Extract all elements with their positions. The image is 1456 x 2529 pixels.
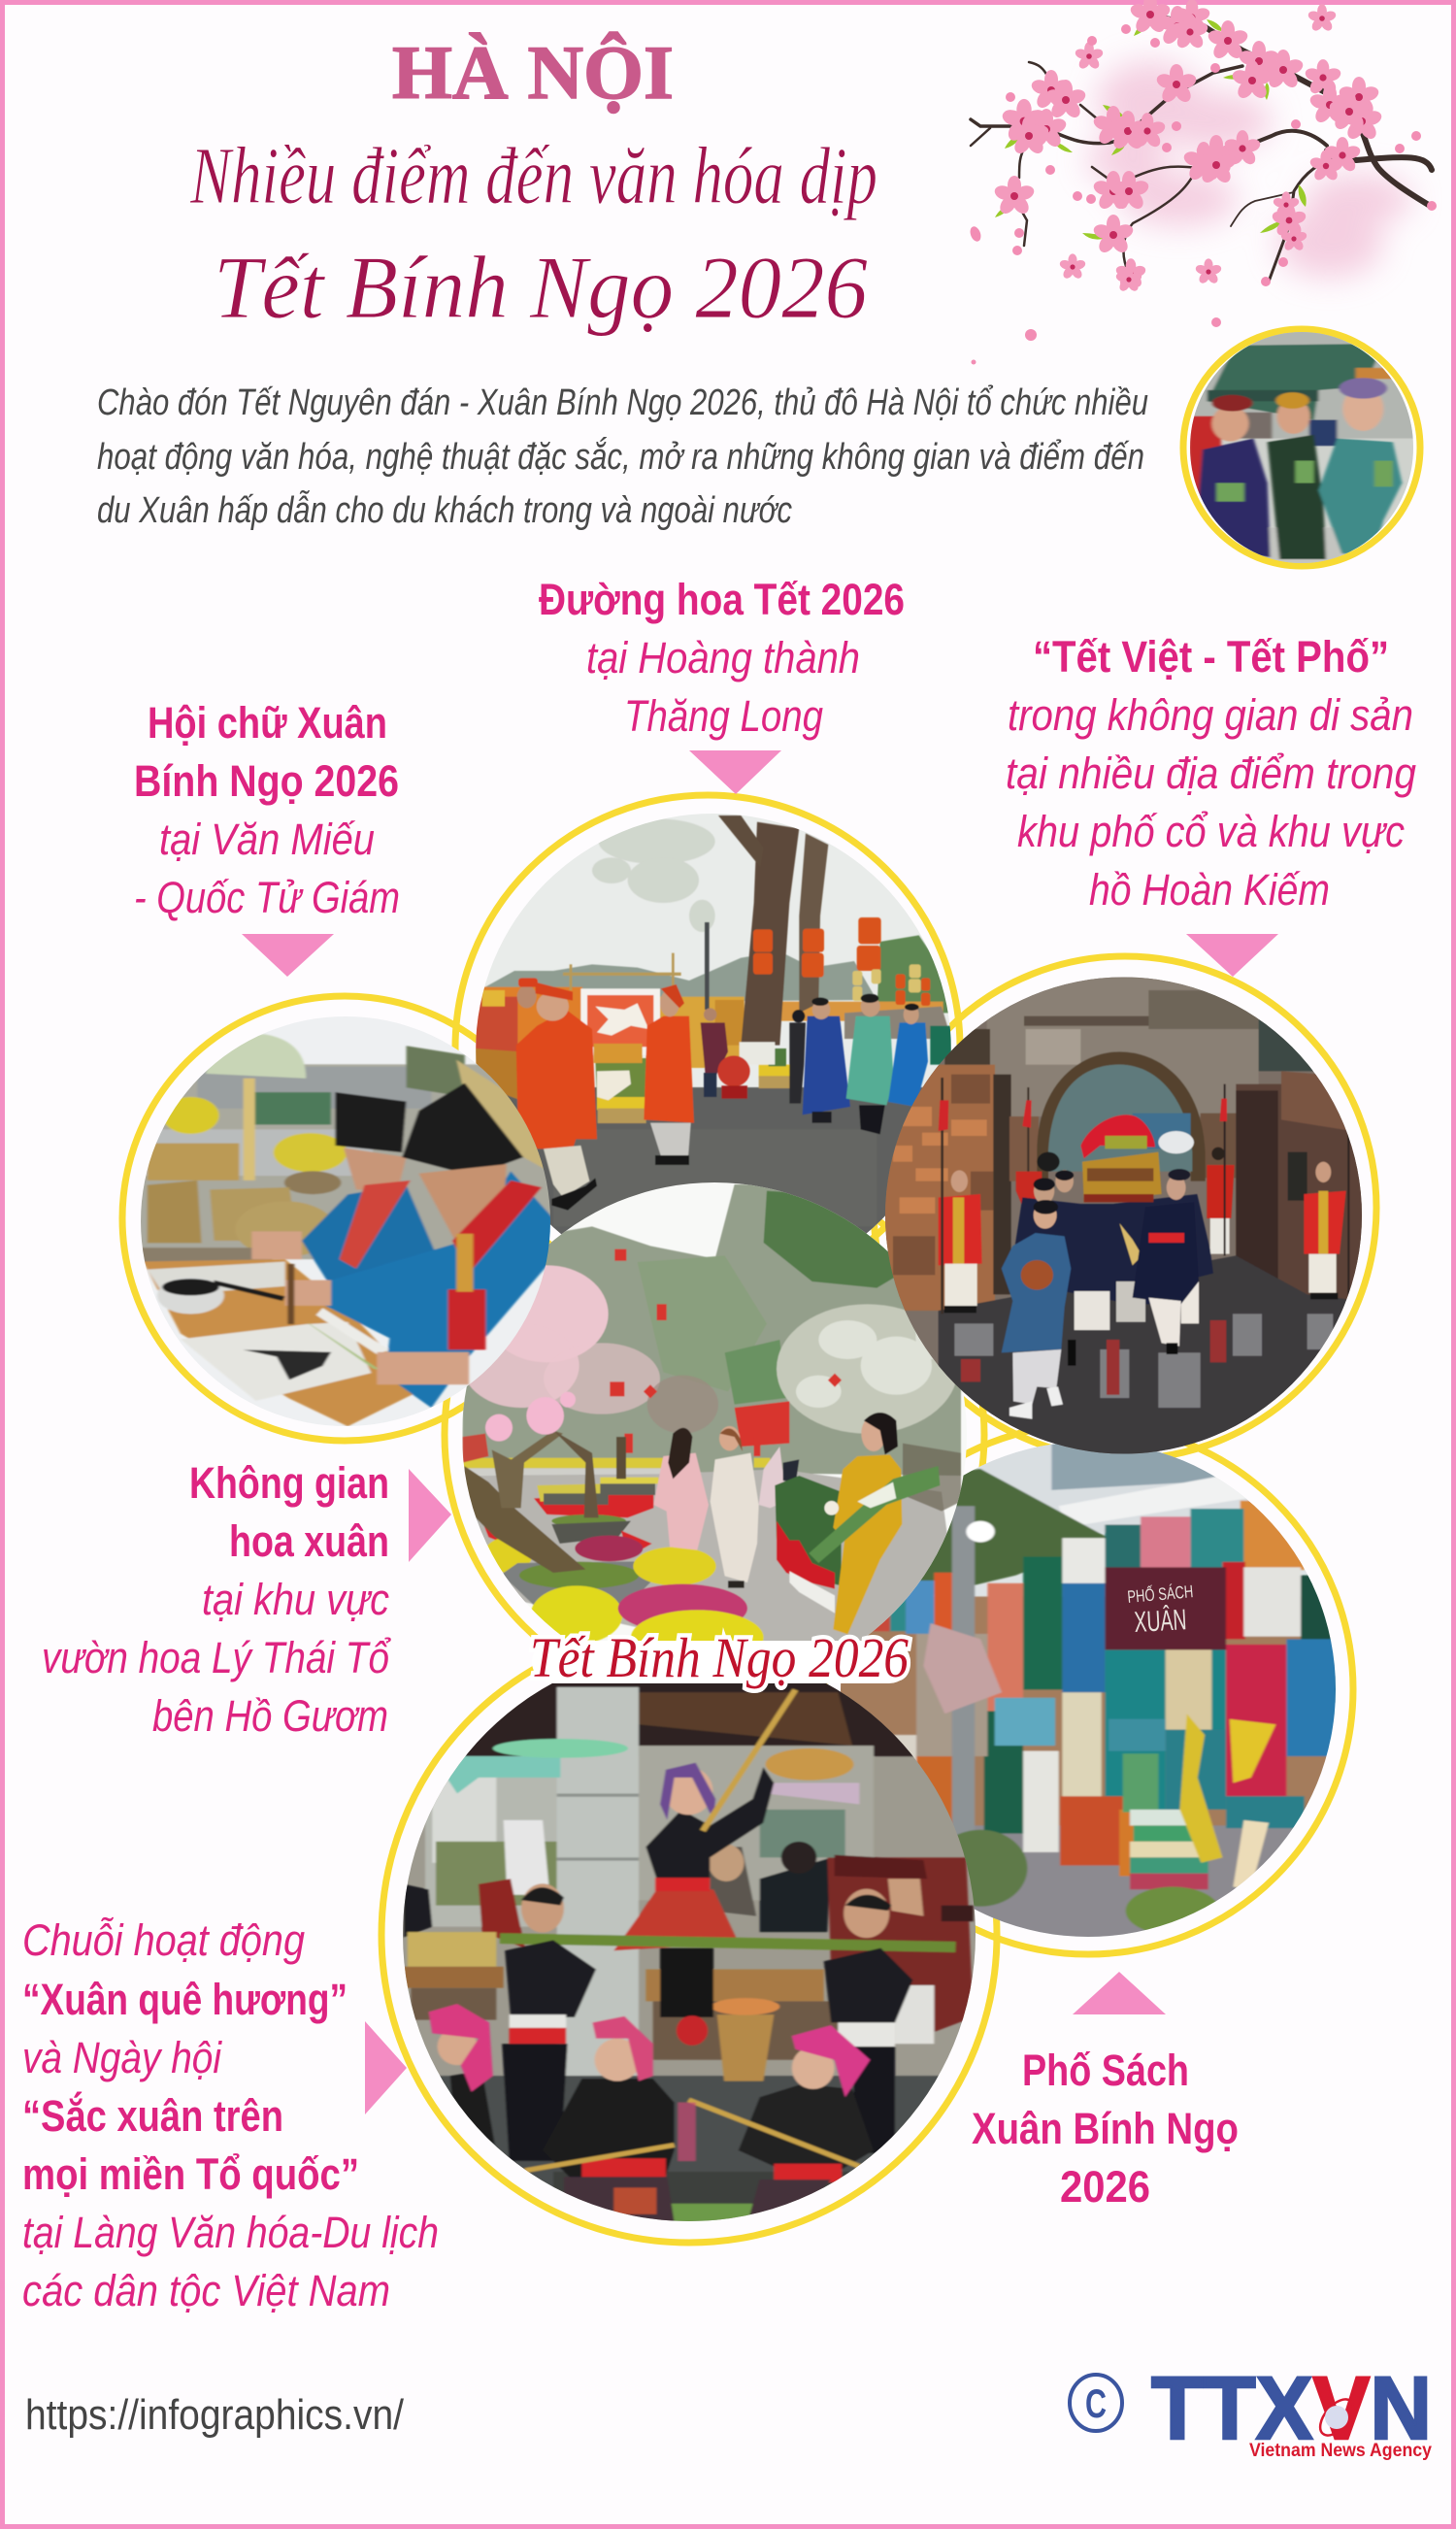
subtitle script line 1: Nhiều điểm đến văn hóa dịp (189, 131, 877, 221)
logo: TTXVN: Vietnam News Agency (1249, 2441, 1432, 2461)
label: Tết Việt - Tết Phố: “Tết Việt - Tết Phố” (1033, 632, 1389, 682)
label: Không gian hoa xuân: Không gian (189, 1458, 389, 1508)
subtitle script line 2: Tết Bính Ngọ 2026 (214, 238, 868, 337)
label: Đường hoa Tết 2026: Đường hoa Tết 2026 (539, 575, 905, 624)
banner: Tết Bính Ngọ 2026: Tết Bính Ngọ 2026 (530, 1626, 909, 1689)
blossom branch decoration (969, 0, 1437, 365)
label: Chuỗi hoạt động: “Sắc xuân trên (22, 2091, 283, 2141)
icon: copyright: C (1085, 2380, 1107, 2426)
label: Hội chữ Xuân: tại Văn Miếu (159, 815, 375, 864)
label: Không gian hoa xuân: hoa xuân (229, 1516, 389, 1566)
photo: Hội chữ Xuân, Văn Miếu (139, 1016, 557, 1427)
photo: Phố Sách Xuân: XUÂN (1134, 1604, 1187, 1639)
intro paragraph: Chào đón Tết Nguyên đán - Xuân Bính Ngọ 2026, thủ đô Hà Nội tổ chức nhiều (97, 383, 1148, 423)
label: Chuỗi hoạt động: “Xuân quê hương” (22, 1975, 347, 2024)
photo: Phố Sách Xuân (831, 1437, 1350, 1948)
photo: Tết Việt - Tết Phố, Cửa Ô Quan Chưởng (878, 971, 1373, 1466)
arrow: down to Tết Việt (1186, 934, 1278, 977)
label: Chuỗi hoạt động: Chuỗi hoạt động (22, 1915, 305, 1965)
label: Không gian hoa xuân: tại khu vực (202, 1575, 389, 1624)
label: Tết Việt - Tết Phố: trong không gian di sản (1008, 690, 1413, 740)
title: Hà Nội: HÀ NỘI (392, 30, 674, 115)
yellow rings behind photos (122, 795, 1376, 2243)
logo: TTXVN: TTXVN (1151, 2359, 1432, 2458)
label: Chuỗi hoạt động (22, 1915, 439, 2315)
label: Tết Việt - Tết Phố: khu phố cổ và khu vực (1017, 807, 1405, 856)
label: Đường hoa Tết 2026: Thăng Long (624, 691, 823, 741)
arrow: down to Đường hoa (689, 750, 781, 794)
intro paragraph: du Xuân hấp dẫn cho du khách trong và ngoài nước (97, 489, 792, 531)
arrow: down to Hội chữ (242, 934, 334, 977)
label: Không gian hoa xuân: vườn hoa Lý Thái Tổ (42, 1633, 392, 1682)
label: Hội chữ Xuân (134, 698, 400, 922)
label: Tết Việt - Tết Phố (1006, 632, 1416, 915)
label: Không gian hoa xuân: bên Hồ Gươm (152, 1691, 388, 1741)
label: Hội chữ Xuân: Bính Ngọ 2026 (134, 756, 399, 806)
label: Phố Sách Xuân Bính Ngọ 2026 (972, 2046, 1239, 2212)
label: Đường hoa Tết 2026 (539, 575, 905, 741)
arrow: right to Chuỗi hoạt động (365, 2021, 407, 2114)
intro paragraph (97, 383, 1148, 531)
arrow: right to Không gian (409, 1469, 451, 1562)
label: Chuỗi hoạt động: và Ngày hội (22, 2033, 223, 2082)
photo: Xuân quê hương, Làng Văn hóa-Du lịch (403, 1683, 976, 2221)
arrow: up to Phố Sách (1073, 1972, 1166, 2014)
intro paragraph: hoạt động văn hóa, nghệ thuật đặc sắc, mở ra những không gian và điểm đến (97, 436, 1144, 478)
small round photo: women in ao dai (1183, 325, 1422, 573)
label: Hội chữ Xuân: - Quốc Tử Giám (134, 873, 400, 922)
icon: copyright (1070, 2375, 1122, 2431)
label: Đường hoa Tết 2026: tại Hoàng thành (586, 633, 860, 682)
label: Không gian hoa xuân (42, 1458, 392, 1741)
label: Tết Việt - Tết Phố: hồ Hoàn Kiếm (1089, 865, 1330, 915)
label: Chuỗi hoạt động: tại Làng Văn hóa-Du lịch (22, 2208, 439, 2257)
photo: Đường hoa Tết, Hoàng thành Thăng Long (476, 814, 951, 1235)
photo: Phố Sách Xuân: PHỐ SÁCH (1127, 1581, 1194, 1607)
label: Phố Sách Xuân Bính Ngọ 2026: Phố Sách (1022, 2046, 1189, 2095)
label: Tết Việt - Tết Phố: tại nhiều địa điểm trong (1006, 749, 1416, 798)
label: Hội chữ Xuân: Hội chữ Xuân (148, 698, 387, 748)
label: Phố Sách Xuân Bính Ngọ 2026: Xuân Bính Ngọ (972, 2104, 1239, 2153)
footer url: https://infographics.vn/ (25, 2391, 405, 2439)
label: Chuỗi hoạt động: mọi miền Tổ quốc” (22, 2149, 359, 2199)
label: Chuỗi hoạt động: các dân tộc Việt Nam (22, 2266, 390, 2315)
photo: Không gian hoa xuân (462, 1182, 967, 1687)
label: Phố Sách Xuân Bính Ngọ 2026: 2026 (1060, 2162, 1150, 2212)
